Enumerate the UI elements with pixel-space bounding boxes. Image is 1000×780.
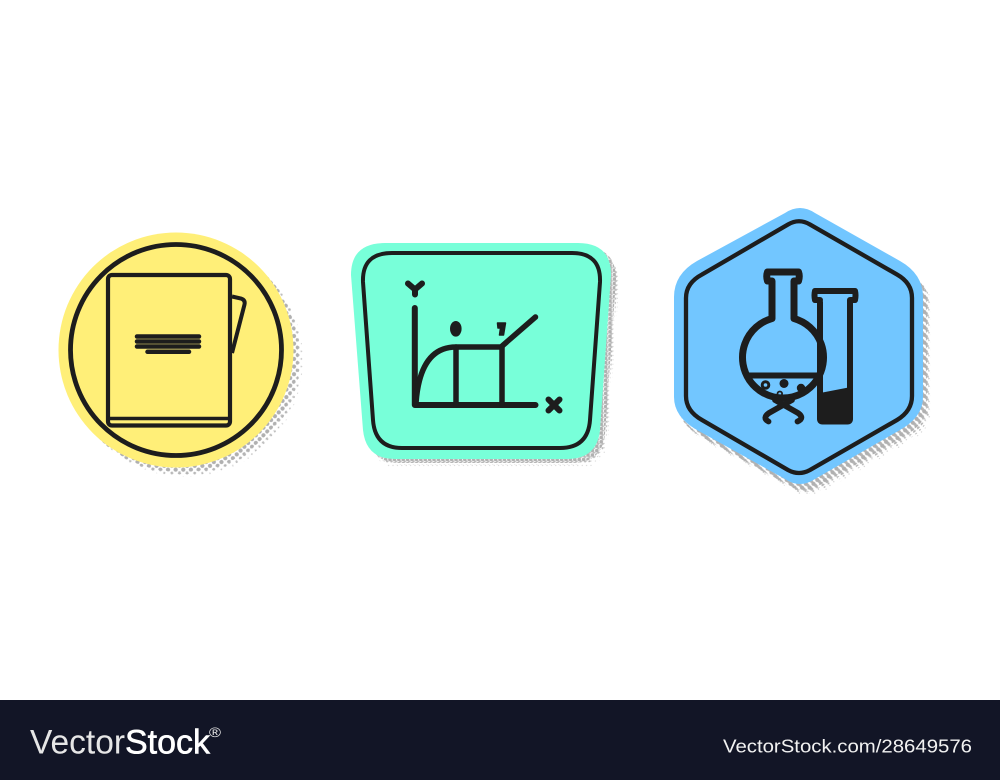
footer bar [0, 700, 1000, 780]
green rounded trapezoid [351, 243, 611, 459]
panel: green badge with graph icon [351, 243, 619, 469]
label: point zero [450, 321, 462, 337]
yellow circle [58, 232, 294, 468]
panel: blue hexagon badge with lab flask icon [674, 208, 932, 496]
panel: yellow circle badge with document folder icon [58, 232, 303, 477]
label: axis X [548, 400, 560, 410]
bubbles [762, 382, 769, 388]
round flask [742, 272, 824, 398]
logo: VectorStock: Vector [30, 724, 125, 762]
registered mark: ® [209, 724, 222, 740]
halftone shadow: blue badge [678, 214, 932, 496]
label: point one [498, 323, 506, 335]
icon: document folder [108, 275, 245, 426]
label: axis Y [408, 284, 422, 294]
logo: Stock bold part: Stock [125, 724, 211, 762]
trapezoid outline [363, 253, 600, 448]
hexagon outline [686, 221, 912, 473]
flask stand [765, 400, 801, 422]
circle outline [70, 244, 282, 456]
icon: flask and test tube [742, 272, 856, 422]
icon: XY graph [408, 284, 560, 410]
test tube [814, 291, 856, 422]
halftone shadow: green badge [356, 247, 619, 469]
image id: VectorStock.com/28649576 [723, 736, 972, 756]
halftone shadow: yellow badge [64, 238, 303, 477]
blue hexagon [674, 208, 923, 484]
